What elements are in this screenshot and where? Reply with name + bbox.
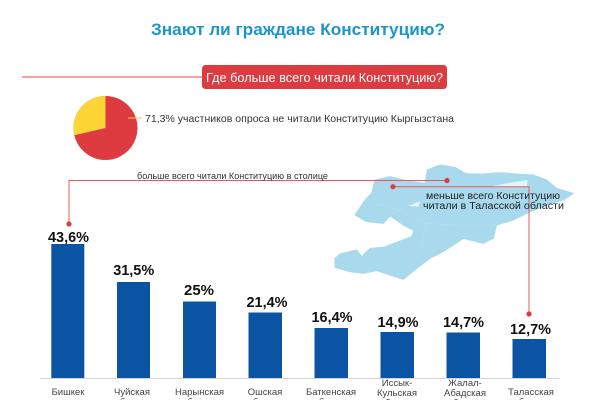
capital callout text: больше всего читали Конституцию в столице <box>137 171 328 182</box>
pie callout: 71,3% участников опроса не читали Конституцию Кыргызстана <box>145 113 454 125</box>
bar: Таласская область: 12,7% <box>510 321 551 338</box>
bar: Нарынская область: 25% <box>184 282 214 299</box>
heading banner: where the Constitution was read most <box>22 65 447 89</box>
bar: Чуйская область: 31,5% <box>113 262 154 279</box>
bar: Ошская область <box>246 294 288 400</box>
bar: Жалал-Абадская область: Абадская <box>444 388 486 399</box>
title: Знают ли граждане Конституцию? <box>151 20 445 39</box>
bar: Таласская область <box>508 321 554 400</box>
bar: Иссык-Кульская область <box>377 314 418 400</box>
bar: Баткенская область <box>306 309 356 400</box>
chart axis <box>40 378 560 380</box>
bar: Нарынская область: Нарынская <box>175 387 224 398</box>
bar: Иссык-Кульская область: Кульская <box>377 388 417 399</box>
map of Kyrgyzstan <box>335 165 573 279</box>
bar: Чуйская область <box>113 262 154 400</box>
bar: Бишкек: Бишкек <box>52 387 85 398</box>
connector: Talas callout <box>390 184 532 317</box>
heading banner: where the Constitution was read most: Где больше всего читали Конституцию? <box>206 71 443 85</box>
bar: Баткенская область: 16,4% <box>312 309 352 326</box>
bar: Жалал-Абадская область: Жалал- <box>448 378 482 389</box>
pie chart: 71.3% did not read <box>73 96 138 160</box>
bar: Ошская область: Ошская <box>248 387 282 398</box>
Talas callout text: меньше всего Конституцию <box>426 191 561 202</box>
bar: Иссык-Кульская область: 14,9% <box>378 314 418 331</box>
bar: Ошская область: 21,4% <box>246 294 288 311</box>
bar: Жалал-Абадская область: 14,7% <box>443 314 484 331</box>
bar: Нарынская область <box>175 282 224 400</box>
connector: capital callout <box>66 178 450 227</box>
bar: Баткенская область: Баткенская <box>306 387 356 398</box>
bar: Бишкек <box>48 229 89 398</box>
bar: Жалал-Абадская область <box>443 314 486 400</box>
bar: Иссык-Кульская область: Иссык- <box>382 378 412 389</box>
bar: Бишкек: 43,6% <box>48 229 89 246</box>
Talas callout text: читали в Таласской области <box>423 200 564 212</box>
Talas callout text <box>423 191 564 212</box>
bar: Таласская область: Таласская <box>508 387 554 398</box>
bar: Чуйская область: Чуйская <box>114 387 150 398</box>
bar chart <box>48 229 554 400</box>
